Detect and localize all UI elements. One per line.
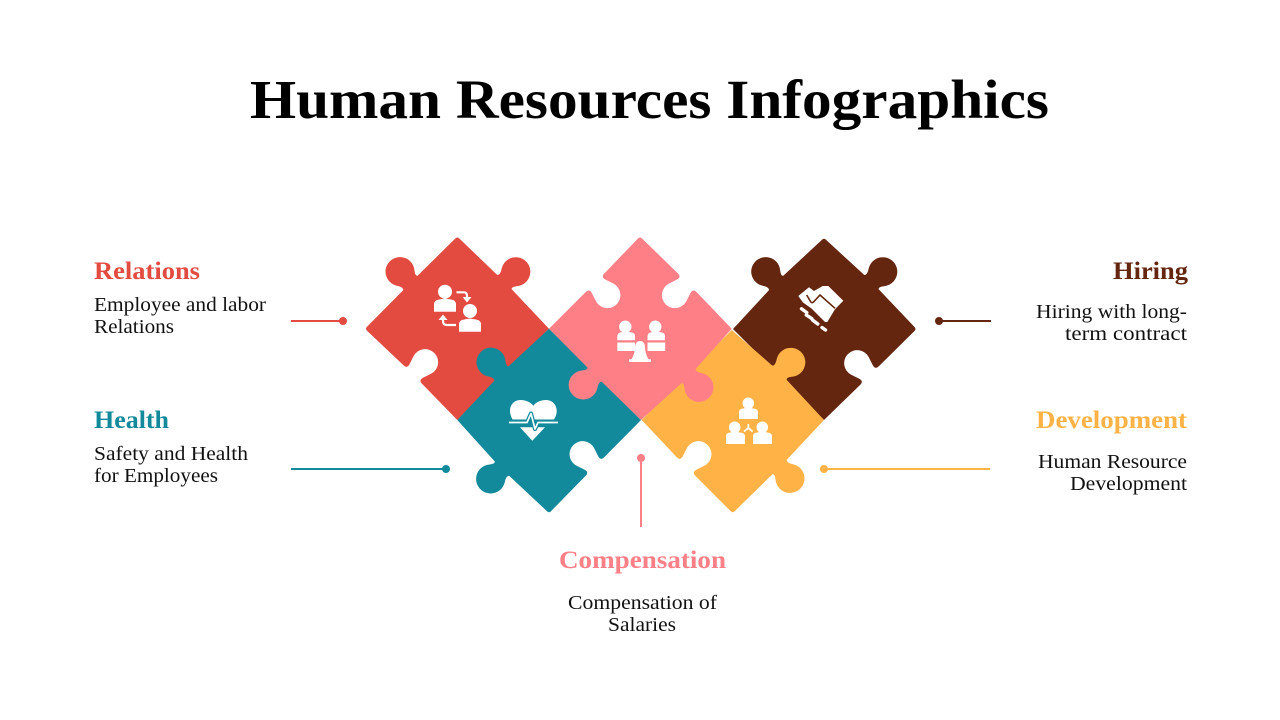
callout: health: for Employees — [94, 465, 218, 487]
callout: relations: Relations — [94, 258, 200, 285]
callout: compensation: Salaries — [608, 614, 676, 636]
callout: hiring — [935, 258, 1189, 345]
piece: relations (red) — [366, 238, 549, 420]
callout: development — [820, 407, 1188, 495]
callout: development: Development — [1070, 473, 1187, 495]
callout: compensation — [559, 454, 726, 636]
puzzle: five interlocking pieces — [366, 238, 916, 512]
callout: development: Human Resource — [1038, 451, 1187, 473]
icon: team hierarchy — [726, 398, 772, 444]
callout: compensation: Compensation of — [568, 592, 717, 614]
piece: health (teal) — [457, 329, 641, 512]
icon: people exchange — [434, 285, 481, 332]
callout: development: Development — [1036, 407, 1188, 434]
callout: health: Safety and Health — [94, 443, 248, 465]
callout: relations: Relations — [94, 316, 174, 338]
callout: relations: Employee and labor — [94, 294, 266, 316]
title: Human Resources Infographics — [250, 69, 1049, 130]
callout: hiring: term contract — [1065, 323, 1187, 345]
callout: health: Health — [94, 407, 169, 434]
callout: hiring: Hiring — [1113, 258, 1189, 285]
icon: handshake — [798, 286, 843, 330]
piece: compensation (pink) — [549, 238, 732, 420]
piece: development (orange) — [642, 330, 824, 512]
icon: balance of people — [617, 320, 665, 362]
callout: hiring: Hiring with long- — [1036, 301, 1187, 323]
piece: hiring (brown) — [733, 239, 916, 420]
callout: relations — [94, 258, 347, 338]
callout: health — [94, 407, 450, 487]
icon: heart rate — [509, 400, 558, 441]
callout: compensation: Compensation — [559, 547, 726, 574]
